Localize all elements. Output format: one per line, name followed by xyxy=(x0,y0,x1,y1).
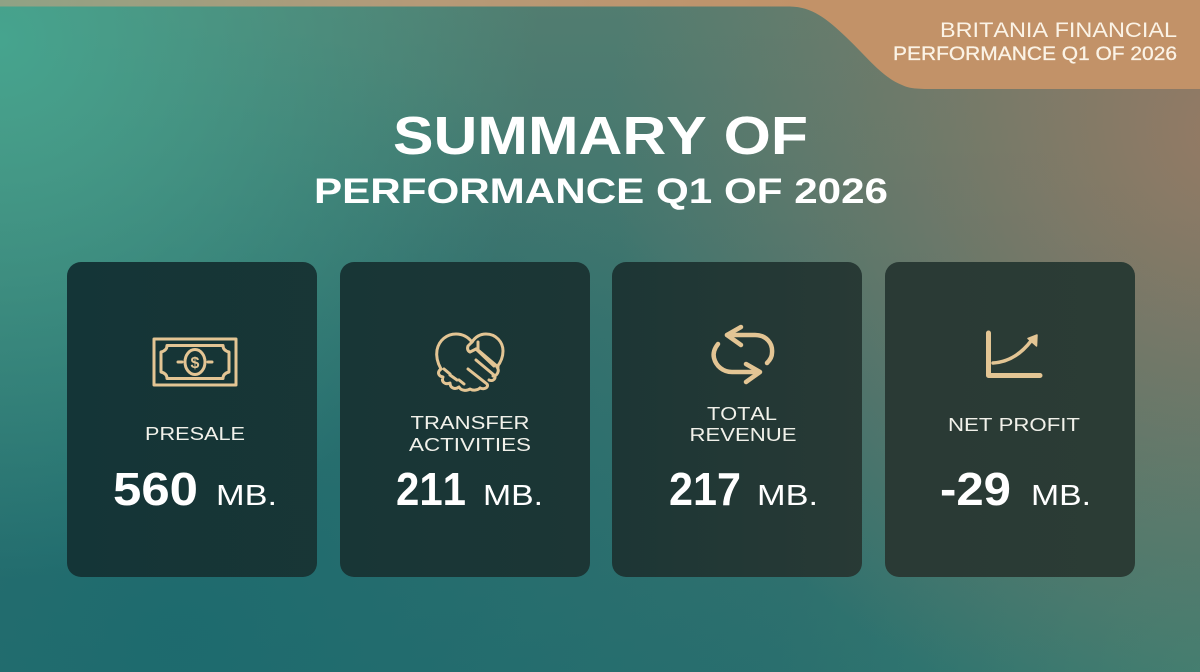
value: -29 MB. xyxy=(940,463,1091,515)
label: total revenue xyxy=(690,403,796,445)
label: total revenue: REVENUE xyxy=(690,424,796,445)
value: 211 MB.: 211 xyxy=(396,463,466,515)
value: 211 MB.: MB. xyxy=(483,480,543,512)
icon: banknote xyxy=(154,339,236,385)
title xyxy=(314,106,888,211)
panel: net profit xyxy=(885,262,1135,577)
value: -29 MB.: MB. xyxy=(1031,480,1091,512)
value: 217 MB.: MB. xyxy=(757,480,818,512)
icon: handshake heart xyxy=(437,334,503,390)
value: 217 MB.: 217 xyxy=(669,463,741,515)
panel: transfer activities xyxy=(340,262,590,577)
label: transfer activities xyxy=(409,412,531,455)
icon: cycle arrows xyxy=(714,327,772,382)
value: 217 MB. xyxy=(669,463,818,515)
header label xyxy=(893,19,1177,65)
label: total revenue: TOTAL xyxy=(707,403,777,424)
header label: BRITANIA FINANCIAL xyxy=(940,19,1177,42)
value: 211 MB. xyxy=(396,463,543,515)
label: transfer activities: ACTIVITIES xyxy=(409,434,531,455)
title: SUMMARY OF xyxy=(393,106,808,166)
header label: PERFORMANCE Q1 OF 2026 xyxy=(893,43,1177,65)
value: 560 MB.: 560 xyxy=(113,463,198,515)
label: presale: PRESALE xyxy=(145,423,245,444)
panel: total revenue xyxy=(612,262,862,577)
label: transfer activities: TRANSFER xyxy=(410,412,530,433)
value: 560 MB.: MB. xyxy=(216,480,277,512)
value: 560 MB. xyxy=(113,463,277,515)
top band and header tab xyxy=(0,0,1200,89)
label: net profit: NET PROFIT xyxy=(948,414,1080,435)
icon: banknote: $ xyxy=(191,355,200,372)
value: -29 MB.: -29 xyxy=(940,463,1011,515)
title: PERFORMANCE Q1 OF 2026 xyxy=(314,172,888,211)
icon: growth chart xyxy=(988,333,1040,376)
panel: presale xyxy=(67,262,317,577)
